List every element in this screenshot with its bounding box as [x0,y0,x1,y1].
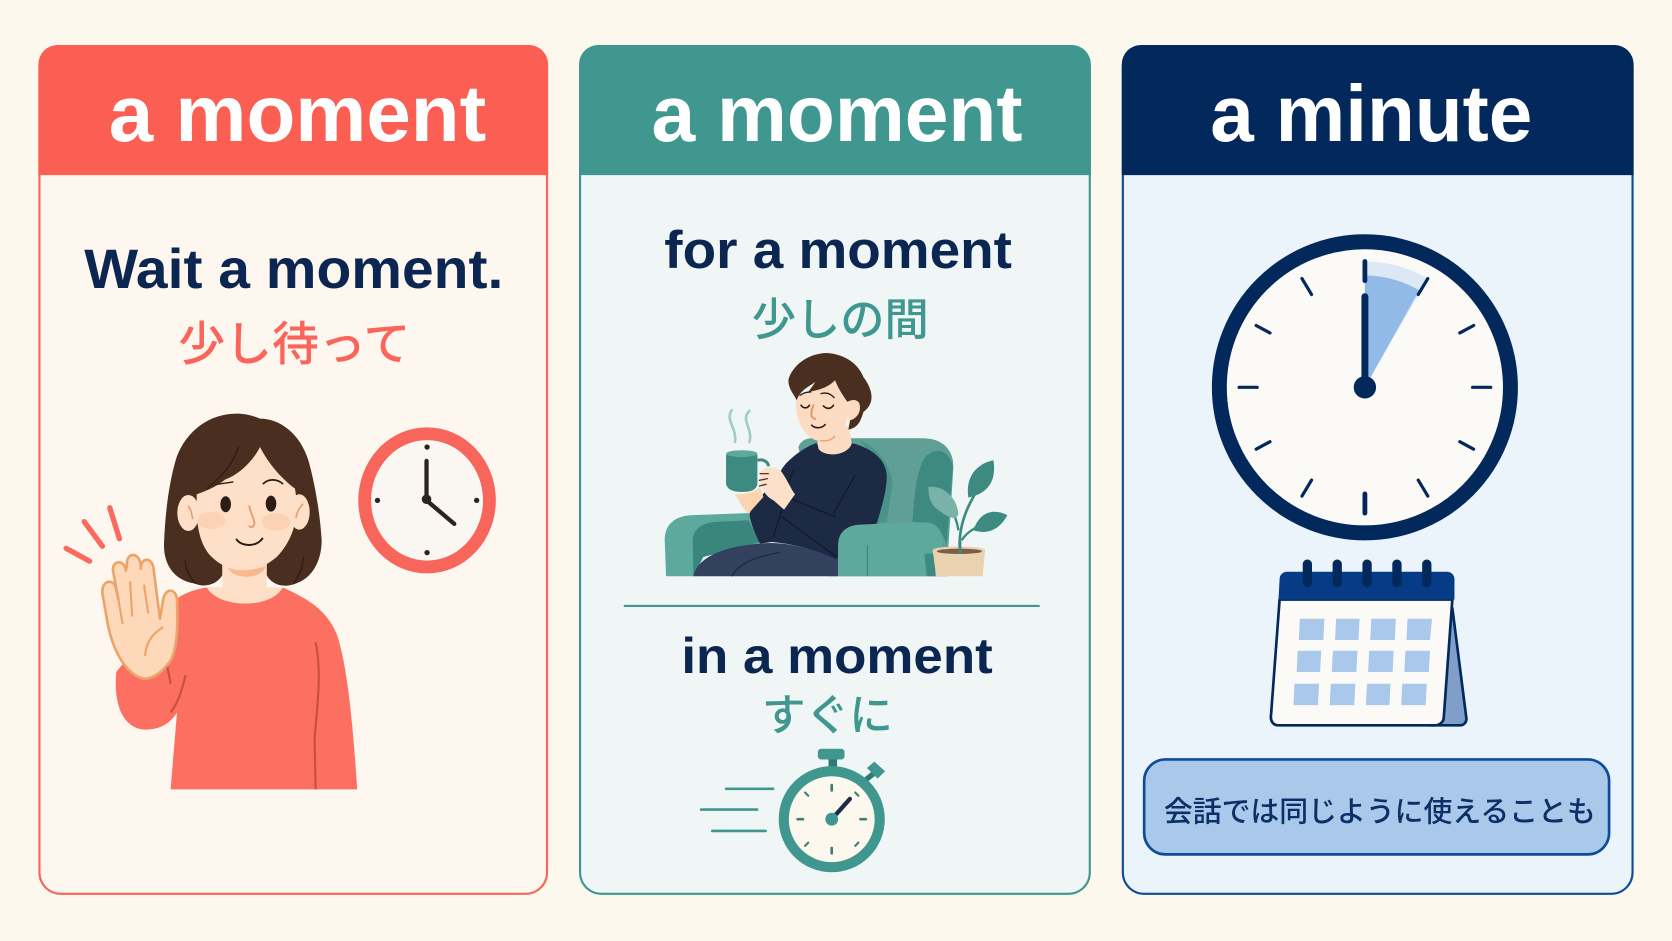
header: a minute: a minute [1210,69,1532,158]
callout: 会話では同じように使えることも [1144,759,1609,854]
steam [730,410,750,442]
panel: a moment (wait) [38,45,548,894]
hand [102,555,177,679]
text: すぐに: すぐに [762,692,893,741]
head [817,425,852,454]
plant [960,477,982,554]
header: a minute [1122,45,1634,175]
heading: Wait a moment.: Wait a moment. [84,238,503,300]
header: a moment (coral) [38,45,548,175]
callout: 会話では同じように使えることも: 会話では同じように使えることも [1164,796,1596,828]
header: a moment (teal) [579,45,1091,175]
icon: man relaxing in armchair [665,353,1007,576]
panel: a minute [1122,45,1634,894]
icon: woman raising hand [66,414,357,789]
heading: for a moment: for a moment [664,221,1012,280]
header: a moment (coral): a moment [109,69,486,158]
motion marks [66,508,119,561]
text: 少し待って: 少し待って [178,319,410,371]
icon: wall clock [365,434,489,567]
text: 少しの間: 少しの間 [752,296,929,345]
divider [624,605,1040,607]
icon: large clock with one-minute wedge [1219,242,1510,533]
icon: stopwatch with speed lines [701,749,885,867]
panel: a moment (for / in) [579,45,1091,894]
icon: desk calendar [1271,560,1466,725]
heading: in a moment: in a moment [681,628,993,684]
header: a moment (teal): a moment [652,69,1023,158]
hands and mug [735,487,763,514]
